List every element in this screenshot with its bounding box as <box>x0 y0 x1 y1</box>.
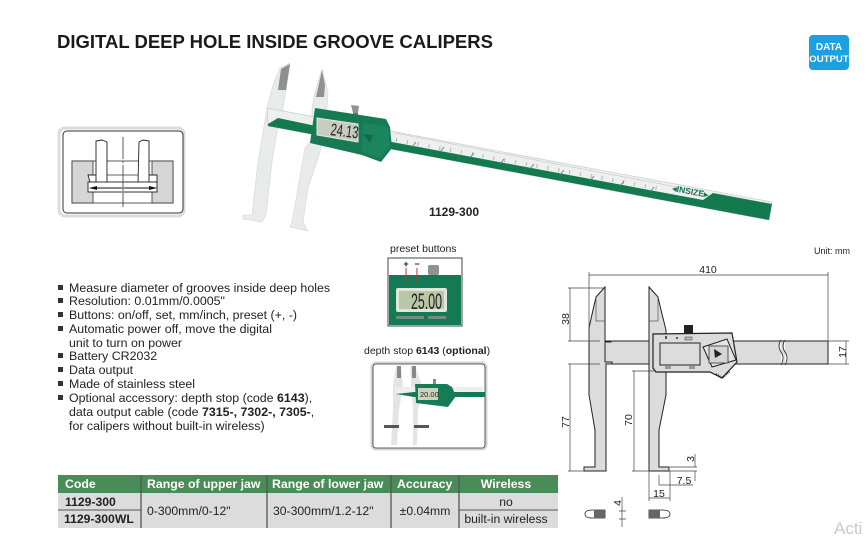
feature list: Automatic power off, move the digital <box>69 322 272 336</box>
dimension lines <box>568 272 849 527</box>
dimension values: 77 <box>560 416 572 428</box>
slider body <box>653 333 737 378</box>
spec table: Range of upper jaw <box>147 477 261 491</box>
label: unit: Unit: mm <box>814 246 850 256</box>
right jaw <box>290 69 328 231</box>
jaw cross sections <box>585 510 605 518</box>
left jaw <box>243 63 290 222</box>
technical drawing <box>560 264 849 527</box>
spec table <box>58 475 558 528</box>
dimension values: 17 <box>837 346 849 358</box>
badge: data output <box>809 35 849 70</box>
spec table: built-in wireless <box>464 512 548 526</box>
jaws and beam <box>584 287 828 471</box>
LCD display <box>317 118 358 142</box>
photo: preset buttons: + <box>403 259 409 269</box>
beam <box>267 108 772 220</box>
photo: preset buttons: 25.00 <box>411 289 442 314</box>
spec table: Accuracy <box>397 477 453 491</box>
caliper photo <box>243 63 772 231</box>
dimension values: 7.5 <box>677 475 691 487</box>
dimension values <box>560 264 849 506</box>
dimension values: 4 <box>612 500 624 506</box>
spec table: ±0.04mm <box>400 504 450 518</box>
feature list: unit to turn on power <box>69 336 182 350</box>
feature list: Resolution: 0.01mm/0.0005" <box>69 294 225 308</box>
feature list: Measure diameter of grooves inside deep holes <box>69 281 330 295</box>
badge: data output: OUTPUT <box>809 54 849 65</box>
spec table: 1129-300 <box>65 495 116 509</box>
spec table: Range of lower jaw <box>272 477 384 491</box>
badge: data output: DATA <box>816 42 842 53</box>
break mark <box>779 340 787 365</box>
spec table: 1129-300WL <box>64 512 134 526</box>
photo: preset buttons <box>388 258 462 326</box>
feature list <box>58 281 330 433</box>
dimension values: 3 <box>685 456 697 462</box>
label: model: 1129-300 <box>429 205 479 219</box>
knob <box>351 105 359 113</box>
feature list: data output cable (code 7315-, 7302-, 7305-, <box>69 405 314 419</box>
dimension values: 38 <box>560 313 572 325</box>
feature list: Optional accessory: depth stop (code 6143), <box>69 391 312 405</box>
dimension values: 410 <box>699 264 717 276</box>
digital body <box>310 108 392 162</box>
photo: preset buttons: − <box>414 259 420 269</box>
feature list: Buttons: on/off, set, mm/inch, preset (+, -) <box>69 308 297 322</box>
feature list: Battery CR2032 <box>69 349 157 363</box>
dimension values: 70 <box>623 414 635 426</box>
feature list: Data output <box>69 363 134 377</box>
caliper photo: 24.13 <box>330 120 360 142</box>
spec table: 0-300mm/0-12" <box>147 504 231 518</box>
brand logo: ◂INSIZE▸ <box>671 183 710 200</box>
spec table: Wireless <box>481 477 531 491</box>
feature list: for calipers without built-in wireless) <box>69 419 265 433</box>
label: preset buttons: preset buttons <box>390 243 457 255</box>
label: depth stop: depth stop 6143 (optional) <box>364 345 490 357</box>
spec table: 30-300mm/1.2-12" <box>273 504 374 518</box>
spec table: no <box>499 495 513 509</box>
icon: groove measuring diagram <box>59 128 184 216</box>
dimension values: 15 <box>653 488 665 500</box>
photo: depth stop <box>372 363 486 449</box>
title: DIGITAL DEEP HOLE INSIDE GROOVE CALIPERS <box>57 32 493 52</box>
feature list: Made of stainless steel <box>69 377 195 391</box>
spec table: Code <box>65 477 96 491</box>
photo: depth stop: 20.00 <box>420 390 439 399</box>
jaw inner blades <box>596 297 658 321</box>
